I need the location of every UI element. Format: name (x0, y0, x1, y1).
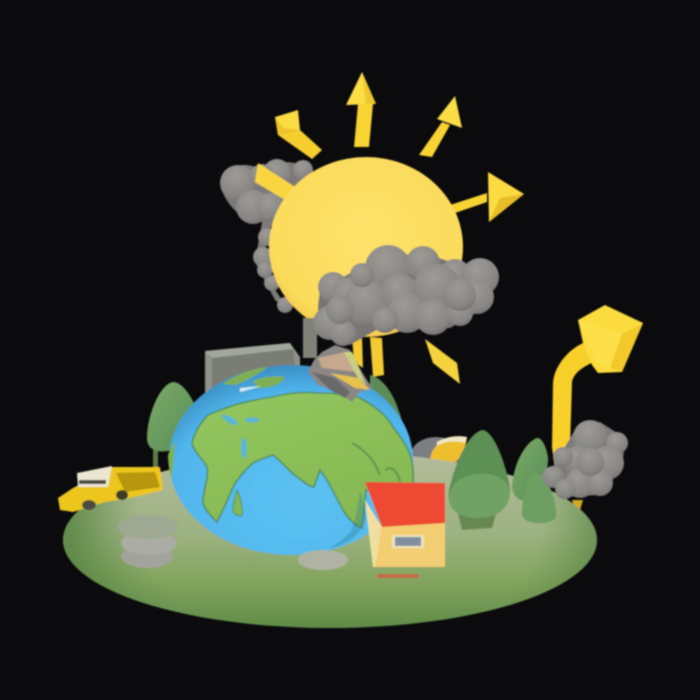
red reflection (377, 574, 419, 578)
arrow: right (450, 172, 524, 222)
globe (168, 365, 413, 555)
inland seas (221, 386, 262, 458)
globe ocean (169, 365, 413, 555)
tree: far (512, 438, 548, 501)
house window (392, 535, 424, 548)
front cloud (313, 245, 499, 346)
sun (269, 157, 463, 337)
arrow: left behind sun (255, 163, 295, 200)
coast shading (330, 490, 366, 548)
rivers and dark ridges (352, 443, 400, 482)
arrow: top (346, 72, 376, 147)
arrow: lower right diamond (425, 339, 460, 384)
house side wall (365, 500, 384, 567)
main continent (192, 392, 413, 528)
scene wrapper (58, 72, 643, 628)
tree left (147, 382, 197, 468)
sun rays arrows (255, 72, 524, 384)
tree: small front (522, 473, 556, 523)
ground island (63, 452, 597, 628)
house roof (365, 482, 445, 527)
house (365, 482, 445, 578)
factory block (205, 343, 300, 395)
chimney (303, 318, 317, 358)
tree: large (449, 430, 510, 530)
back cloud behind the sun (220, 159, 313, 313)
tree behind globe, right (370, 375, 404, 430)
trees right (449, 430, 556, 530)
arrow: upper right (419, 96, 462, 157)
flat rock (298, 550, 348, 570)
northern land (222, 367, 285, 388)
left edge land (168, 442, 175, 478)
bus (58, 466, 163, 512)
small peninsula (233, 490, 242, 516)
ball and sign behind trees (411, 436, 467, 484)
big yellow arrow (552, 305, 643, 510)
stone stack (118, 515, 178, 568)
arrow: lower stubs (352, 337, 384, 377)
smoke mound on globe (308, 345, 372, 402)
arrow: upper left (275, 110, 322, 159)
house front wall (375, 521, 445, 567)
right cloud (542, 420, 628, 499)
